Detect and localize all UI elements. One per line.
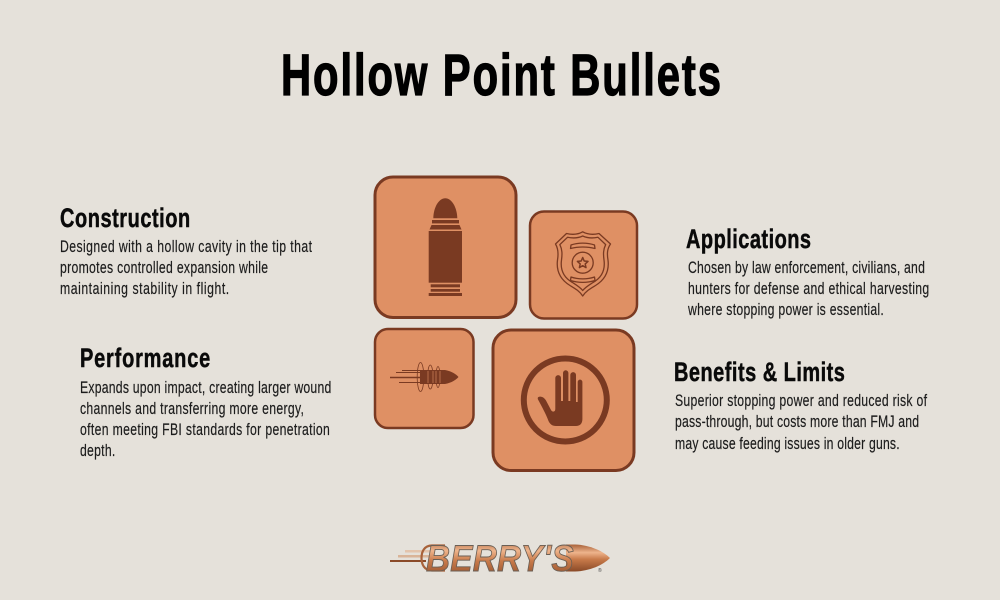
icon: cartridge [429,198,462,296]
body: performance [80,379,331,461]
text block: benefits and limits [674,357,928,454]
heading: benefits and limits: Benefits & Limits [674,357,845,388]
body: construction: promotes controlled expansion while [60,259,268,278]
body: construction [60,238,312,299]
body: applications [687,259,929,320]
icon: police badge [556,232,610,296]
body: benefits and limits: may cause feeding issues in older guns. [675,435,900,454]
text block: construction [60,203,312,299]
logo speed lines [390,550,432,562]
icon: stop hand [524,358,607,442]
body: construction: Designed with a hollow cavity in the tip that [60,238,312,257]
body: performance: depth. [80,442,115,461]
logo casing oval [422,546,445,570]
heading: applications: Applications [686,224,811,255]
body: applications: hunters for defense and ethical harvesting [688,280,929,299]
text block: applications [686,224,929,320]
panel: bullet cartridge [375,177,516,318]
panel: bullet in flight [375,329,474,428]
heading: performance: Performance [80,343,210,374]
logo: Berry's [390,538,610,579]
body: benefits and limits: Superior stopping power and reduced risk of [675,392,928,411]
panel: stop hand [493,330,634,470]
body: performance: often meeting FBI standards for penetration [80,421,330,440]
icon: bullet in flight [390,362,458,392]
body: benefits and limits [675,392,928,454]
body: construction: maintaining stability in flight. [60,280,229,299]
body: applications: where stopping power is essential. [687,301,884,320]
body: performance: Expands upon impact, creating larger wound [80,379,331,398]
heading: construction: Construction [60,203,190,234]
body: performance: channels and transferring more energy, [80,400,304,419]
title: Hollow Point Bullets [281,42,721,108]
panel: police badge [530,212,637,318]
logo wordmark: BERRY'S [426,538,574,579]
text block: performance [80,343,331,461]
logo registered mark: ® [598,567,602,574]
body: benefits and limits: pass-through, but costs more than FMJ and [675,413,919,432]
body: applications: Chosen by law enforcement, civilians, and [688,259,925,278]
logo bullet tip [566,544,610,572]
